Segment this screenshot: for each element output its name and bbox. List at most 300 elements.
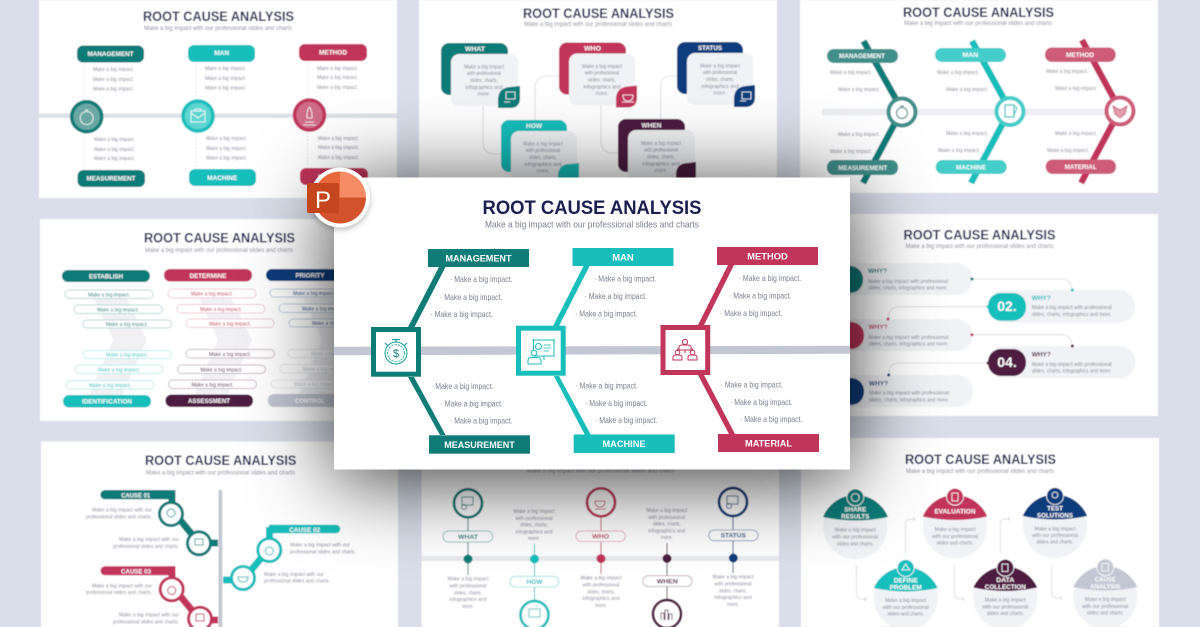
connectors	[888, 279, 1072, 375]
header pills: ESTABLISH	[89, 274, 123, 280]
list: material: · Make a big impact.	[740, 415, 802, 424]
header: measurement	[429, 435, 530, 454]
category pills: MAN	[963, 52, 978, 59]
navy outline pills	[270, 289, 377, 327]
node: data collection: COLLECTION	[985, 584, 1026, 591]
red pill text	[191, 292, 251, 327]
subtitle: Make a big impact with our professional slides and charts	[527, 468, 675, 475]
row text	[868, 268, 1112, 404]
header: method	[717, 247, 818, 265]
icon: PowerPoint logo	[307, 168, 370, 230]
teal pill text: Make a big impact.	[88, 292, 130, 298]
column: what: WHAT	[458, 534, 478, 541]
subtitle: Make a big impact with our professional slides and charts	[146, 470, 295, 477]
card: when: infographics and	[642, 162, 680, 168]
teal outline pills	[65, 290, 172, 328]
panel: fishbone slide top right	[800, 0, 1158, 193]
cyan outline pills	[66, 350, 172, 389]
icon: briefcase badge	[183, 101, 213, 131]
card: who: slides, charts,	[588, 78, 616, 84]
card: what: with professional	[467, 71, 501, 77]
header pills: DETERMINE	[190, 273, 227, 280]
vertical spine	[218, 490, 222, 627]
category pills: MEASUREMENT	[838, 165, 887, 172]
column: status: slides, charts,	[719, 588, 747, 594]
node: data collection: DATA	[996, 577, 1015, 584]
header pills	[62, 269, 356, 408]
heading: ROOT CAUSE ANALYSIS	[143, 9, 294, 24]
row text: slides, charts, infographics and more.	[868, 342, 949, 348]
node: share results: RESULTS	[841, 514, 870, 521]
main slide shadow	[334, 187, 850, 479]
header: measurement: MEASUREMENT	[444, 440, 515, 451]
column: how: Make a big impact	[514, 509, 555, 515]
header: material	[718, 434, 819, 452]
node: share results: Make a big impact	[835, 528, 876, 534]
list text: · Make a big impact.	[314, 85, 358, 91]
gray outline pills	[271, 350, 376, 388]
list text: Make a big impact.	[946, 131, 988, 137]
list text: · Make a big impact.	[315, 145, 359, 151]
number badges	[825, 266, 1026, 405]
card: what: slides, charts,	[470, 78, 498, 84]
row text: WHY?	[868, 268, 887, 275]
cause 03	[86, 566, 218, 627]
list text: · Make a big impact.	[203, 156, 247, 162]
red outline pills	[168, 289, 274, 328]
list: measurement	[431, 382, 512, 426]
icon: stopwatch with dollar	[374, 330, 418, 374]
icon: presenter with board	[518, 328, 563, 373]
cyan pill text: Make a big impact.	[106, 352, 148, 358]
column: status: STATUS	[721, 533, 747, 540]
row text: slides, charts, infographics and more.	[868, 286, 948, 292]
cause 03: Make a big impact with our	[92, 583, 152, 589]
icon: stopwatch with dollar: $	[393, 348, 399, 360]
category pills	[77, 44, 368, 187]
list: machine: · Make a big impact.	[595, 416, 658, 425]
list text: Make a big impact.	[1047, 148, 1089, 154]
column: status: infographics and	[714, 595, 752, 601]
card: how: infographics and	[524, 162, 562, 168]
card: who: with professional	[585, 70, 619, 76]
list text: Make a big impact.	[830, 149, 872, 155]
list text: · Make a big impact.	[91, 156, 135, 162]
cyan pill text: Make a big impact.	[89, 383, 131, 389]
panel: pills slide middle left	[40, 219, 377, 421]
category pills: MEASUREMENT	[86, 176, 136, 182]
card: how: Make a big impact	[523, 142, 563, 148]
red pill text: Make a big impact.	[209, 321, 251, 327]
card: when: more.	[654, 168, 668, 174]
column: who: infographics and	[582, 596, 620, 602]
cause 02: Make a big impact with our	[264, 572, 324, 578]
heading: ROOT CAUSE ANALYSIS	[144, 231, 295, 246]
bone: measurement	[408, 377, 446, 435]
node: test solutions: SOLUTIONS	[1037, 512, 1074, 519]
chevron backdrop	[87, 290, 355, 400]
header: man	[572, 248, 674, 266]
header: method: METHOD	[747, 252, 788, 262]
heading: ROOT CAUSE ANALYSIS	[482, 197, 702, 219]
column: how: with professional	[515, 516, 552, 522]
row text: slides, charts, infographics and more.	[1032, 369, 1112, 375]
list: measurement: · Make a big impact.	[450, 416, 512, 426]
node: evaluation: slides and charts.	[936, 540, 974, 546]
list: machine	[575, 382, 658, 425]
node: share results: slides and charts.	[837, 542, 874, 548]
category pills: MAN	[214, 50, 229, 57]
bone: man	[553, 266, 590, 326]
header: management	[428, 249, 529, 267]
node: evaluation: EVALUATION	[934, 508, 976, 515]
header: material: MATERIAL	[745, 438, 792, 450]
card: what: more.	[478, 92, 490, 98]
column: what: slides, charts,	[454, 590, 482, 596]
cause 01: Make a big impact with our	[92, 508, 152, 514]
gray pill text	[294, 352, 353, 388]
card: what: infographics and	[466, 85, 503, 91]
node: data collection: slides and charts.	[987, 611, 1024, 617]
subtitle: Make a big impact with our professional slides and charts	[904, 20, 1052, 27]
bone: method	[698, 265, 734, 325]
node: cause analysis: slides and charts.	[1087, 610, 1124, 616]
connectors	[483, 76, 677, 154]
panel: timeline slide bottom middle	[422, 460, 779, 627]
list: management: · Make a big impact.	[430, 310, 493, 319]
node: share results: SHARE	[844, 507, 867, 514]
card: status	[677, 42, 755, 107]
number badges: 04.	[997, 354, 1017, 370]
list: man	[575, 274, 656, 319]
card: status: STATUS	[698, 45, 723, 52]
row text: slides, charts, infographics and more.	[869, 398, 949, 404]
header pills: IDENTIFICATION	[82, 398, 132, 406]
column: how: infographics and	[516, 529, 552, 535]
node: share results	[823, 489, 888, 559]
cause 03: Make a big impact with our	[119, 613, 179, 619]
card: status: Make a big impact	[700, 64, 740, 70]
column: when: infographics and	[648, 528, 685, 534]
card: what: Make a big impact	[464, 64, 504, 70]
cause 01: Make a big impact with our	[119, 537, 179, 543]
node: cause analysis: ANALYSIS	[1090, 583, 1121, 590]
gray pill text: Make a big impact.	[294, 382, 336, 388]
list text: · Make a big impact.	[315, 155, 359, 161]
subtitle: Make a big impact with our professional slides and charts	[524, 21, 672, 28]
row text: WHY?	[869, 380, 888, 388]
row text: WHY?	[1032, 352, 1051, 358]
list: method: · Make a big impact.	[720, 309, 782, 318]
node: define problem: PROBLEM	[890, 585, 922, 592]
number badges: 02.	[997, 298, 1017, 314]
card: who: WHO	[584, 46, 601, 52]
navy pill text: Make a big impact.	[302, 306, 344, 312]
node: test solutions: with our professional	[1032, 533, 1078, 539]
row text: WHY?	[868, 324, 888, 331]
cyan pill text	[89, 352, 148, 389]
column: when: WHEN	[657, 578, 678, 585]
icon: rocket badge	[294, 100, 324, 130]
cause 02: professional slides and charts.	[264, 578, 330, 584]
list: method: · Make a big impact.	[729, 292, 792, 300]
icon: stopwatch ring	[888, 98, 916, 126]
node: cause analysis: Make a big impact	[1085, 597, 1126, 603]
list text: Make a big impact.	[838, 132, 880, 138]
column: when	[643, 508, 692, 627]
teal pill text	[88, 292, 148, 328]
node: data collection: with our professional	[982, 604, 1028, 610]
panel: timeline slide top left	[39, 0, 397, 198]
column: how	[510, 509, 559, 627]
panel: why slide middle right	[825, 214, 1158, 416]
list: man: · Make a big impact.	[575, 310, 638, 319]
list text: · Make a big impact.	[314, 75, 358, 81]
list text: · Make a big impact.	[315, 136, 359, 142]
node: define problem: with our professional	[883, 605, 929, 611]
dashed connectors	[84, 62, 308, 168]
list: management	[430, 275, 512, 319]
category pills: MANAGEMENT	[839, 53, 885, 60]
column: who: Make a big impact	[580, 576, 622, 582]
column: what: infographics and	[450, 597, 486, 603]
node: define problem	[874, 560, 938, 627]
header: management: MANAGEMENT	[446, 253, 512, 264]
list text: · Make a big impact.	[91, 147, 135, 153]
cause 02: Make a big impact with our	[290, 543, 350, 549]
red pill text: Make a big impact.	[191, 292, 233, 298]
list text: · Make a big impact.	[202, 86, 246, 92]
panel: process slide bottom right	[801, 438, 1159, 627]
list text: · Make a big impact.	[90, 67, 134, 73]
panel: cause slide bottom left	[41, 442, 398, 627]
column: when: more.	[661, 535, 673, 541]
list: method	[720, 274, 801, 318]
list text: Make a big impact.	[1055, 86, 1097, 92]
column: status: more.	[727, 602, 739, 608]
heading: ROOT CAUSE ANALYSIS	[905, 452, 1056, 467]
list: man: · Make a big impact.	[594, 274, 656, 284]
list: measurement: · Make a big impact.	[431, 382, 494, 391]
bone: machine	[554, 376, 591, 435]
node: test solutions: slides and charts.	[1036, 540, 1074, 546]
list: material	[720, 380, 802, 424]
navy pill text: Make a big impact.	[312, 321, 354, 327]
column: who: more.	[595, 603, 607, 609]
node: cause analysis	[1073, 559, 1137, 627]
card: when: slides, charts,	[647, 154, 675, 160]
connector dots	[886, 278, 1074, 376]
list: material: · Make a big impact.	[730, 398, 792, 407]
icon: clipboard ring	[996, 98, 1024, 125]
icon: organisation people	[663, 328, 708, 372]
column: who	[576, 488, 625, 609]
purple pill text	[192, 352, 251, 388]
list: management: · Make a big impact.	[450, 275, 512, 284]
node: evaluation: Make a big impact	[934, 527, 976, 533]
card: when	[618, 119, 696, 185]
category pills	[827, 48, 1116, 175]
column: status: Make a big impact	[712, 575, 754, 581]
card: how	[501, 120, 579, 185]
red bone	[1081, 40, 1120, 183]
spine	[334, 346, 850, 355]
category pills: METHOD	[319, 50, 347, 56]
node: share results: with our professional	[832, 534, 878, 540]
heading: ROOT CAUSE ANALYSIS	[145, 453, 296, 468]
panel: cards slide top middle	[419, 0, 777, 185]
subtitle: Make a big impact with our professional slides and charts	[145, 247, 293, 254]
column: when: Make a big impact	[646, 508, 688, 514]
cause 01: professional slides and charts.	[113, 544, 179, 550]
navy pill text	[293, 291, 354, 327]
card: how: more.	[536, 168, 550, 174]
subtitle: Make a big impact with our professional slides and charts	[906, 243, 1054, 250]
list: man: · Make a big impact.	[584, 292, 647, 301]
header: machine: MACHINE	[602, 439, 646, 450]
subtitle: Make a big impact with our professional slides and charts	[906, 468, 1054, 475]
card: when: with professional	[644, 148, 678, 154]
icon: PowerPoint logo: P	[315, 187, 331, 214]
row pills	[825, 263, 1136, 407]
card: who: infographics and	[584, 84, 621, 90]
list text: · Make a big impact.	[314, 66, 358, 72]
navy pill text: Make a big impact.	[293, 291, 335, 297]
list text: Make a big impact.	[938, 148, 980, 154]
subtitle: Make a big impact with our professional slides and charts	[485, 219, 699, 229]
list: method: · Make a big impact.	[739, 274, 801, 283]
column: how: more.	[528, 536, 540, 542]
teal pill text: Make a big impact.	[97, 307, 139, 313]
cyan bone	[971, 41, 1010, 183]
node: test solutions	[1023, 488, 1087, 558]
list text: Make a big impact.	[838, 87, 880, 93]
cause 01: professional slides and charts.	[86, 514, 152, 520]
header pills: ASSESSMENT	[188, 398, 230, 405]
column: who: slides, charts,	[587, 589, 615, 595]
teal bone	[863, 41, 902, 183]
header: machine	[574, 434, 675, 453]
list text: · Make a big impact.	[202, 76, 246, 82]
category pills: METHOD	[1066, 52, 1094, 59]
card: when: WHEN	[642, 122, 662, 130]
cause 02: professional slides and charts.	[290, 549, 356, 555]
panel: main fishbone slide	[334, 178, 850, 470]
row text: Make a big impact with professional	[1032, 362, 1112, 368]
card: status: more.	[714, 90, 726, 96]
category pills: MACHINE	[207, 175, 238, 182]
column: when: with professional	[647, 515, 685, 521]
card: status: infographics and	[702, 84, 739, 90]
column: who: WHO	[592, 534, 609, 541]
card: what: WHAT	[465, 46, 485, 53]
card: how: slides, charts,	[529, 155, 557, 161]
heading: ROOT CAUSE ANALYSIS	[903, 5, 1054, 20]
node: define problem: slides and charts.	[887, 612, 924, 618]
list text: Make a big impact.	[937, 70, 979, 76]
row text: Make a big impact with professional	[868, 335, 948, 341]
category pills: MACHINE	[956, 164, 987, 172]
cyan pill text: Make a big impact.	[98, 367, 140, 373]
teal pill text: Make a big impact.	[106, 322, 148, 328]
list text: · Make a big impact.	[203, 136, 247, 142]
purple pill text: Make a big impact.	[200, 367, 243, 373]
list text: · Make a big impact.	[202, 66, 246, 72]
card: who: Make a big impact	[582, 64, 622, 70]
gray pill text: Make a big impact.	[311, 352, 353, 358]
cause 01	[86, 490, 218, 555]
card: how: HOW	[526, 123, 543, 130]
card: who	[559, 42, 637, 108]
cause 03: CAUSE 03	[121, 568, 151, 575]
column: status: with professional	[714, 582, 752, 588]
card: when: Make a big impact	[641, 141, 681, 147]
list text: Make a big impact.	[830, 70, 872, 76]
row text: Make a big impact with professional	[1032, 305, 1112, 311]
node: evaluation: with our professional	[932, 534, 978, 540]
cause 02	[223, 525, 356, 590]
row text: Make a big impact with professional	[868, 279, 948, 285]
list: machine: · Make a big impact.	[585, 399, 648, 408]
column: what: with professional	[449, 584, 486, 590]
column: status	[709, 488, 758, 608]
cause 02: CAUSE 02	[289, 527, 321, 534]
list text	[830, 69, 1097, 155]
gray pill text: Make a big impact.	[303, 367, 345, 373]
red pill text: Make a big impact.	[200, 307, 242, 313]
node: define problem: DEFINE	[894, 577, 918, 584]
cause 01: CAUSE 01	[121, 492, 150, 499]
header pills: PRIORITY	[296, 272, 325, 280]
column: how: slides, charts,	[520, 522, 548, 528]
list: material: · Make a big impact.	[720, 380, 783, 390]
row text: WHY?	[1032, 295, 1051, 302]
column: what	[443, 489, 493, 610]
column: what: more.	[462, 604, 474, 610]
node: data collection: Make a big impact	[985, 598, 1026, 604]
card: how: with professional	[526, 148, 560, 154]
icon: handshake ring	[1106, 98, 1134, 124]
icon: stopwatch badge	[72, 102, 102, 132]
row text: slides, charts, infographics and more.	[1032, 312, 1112, 318]
node: test solutions: TEST	[1047, 506, 1063, 513]
column: when: slides, charts,	[653, 522, 681, 528]
list text	[90, 66, 359, 162]
bone: material	[698, 375, 735, 434]
node: cause analysis: with our professional	[1082, 604, 1128, 610]
list text: Make a big impact.	[946, 87, 988, 93]
list text: · Make a big impact.	[90, 86, 134, 92]
list text: · Make a big impact.	[91, 137, 135, 143]
column: who: with professional	[582, 582, 620, 588]
purple outline pills	[168, 350, 274, 388]
list: management: · Make a big impact.	[440, 293, 502, 302]
card: who: more.	[596, 91, 608, 97]
category pills: MATERIAL	[318, 174, 350, 181]
list: machine: · Make a big impact.	[575, 382, 638, 390]
card: status: slides, charts,	[706, 77, 734, 83]
header: man: MAN	[612, 252, 634, 264]
node: data collection	[973, 559, 1037, 627]
list text: Make a big impact.	[1046, 69, 1088, 75]
purple pill text: Make a big impact.	[209, 352, 251, 358]
node: define problem: Make a big impact	[885, 598, 927, 604]
flow arrows	[856, 517, 1062, 601]
list text: · Make a big impact.	[90, 77, 134, 83]
category pills: MANAGEMENT	[88, 51, 134, 58]
heading: ROOT CAUSE ANALYSIS	[904, 227, 1056, 242]
list: measurement: · Make a big impact.	[440, 400, 503, 408]
